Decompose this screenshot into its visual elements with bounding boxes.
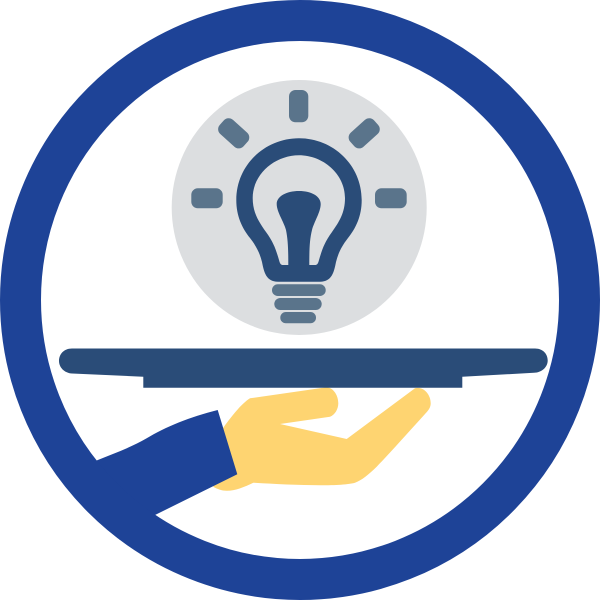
bulb glass with filament [236, 138, 362, 282]
icon: sleeve [70, 410, 237, 540]
icon: serving tray [59, 348, 548, 388]
icon: light rays [191, 90, 407, 208]
bulb base [272, 284, 326, 323]
icon: light bulb [236, 138, 362, 323]
icon: hand [213, 387, 431, 491]
icon: gray circle behind bulb [172, 80, 427, 335]
